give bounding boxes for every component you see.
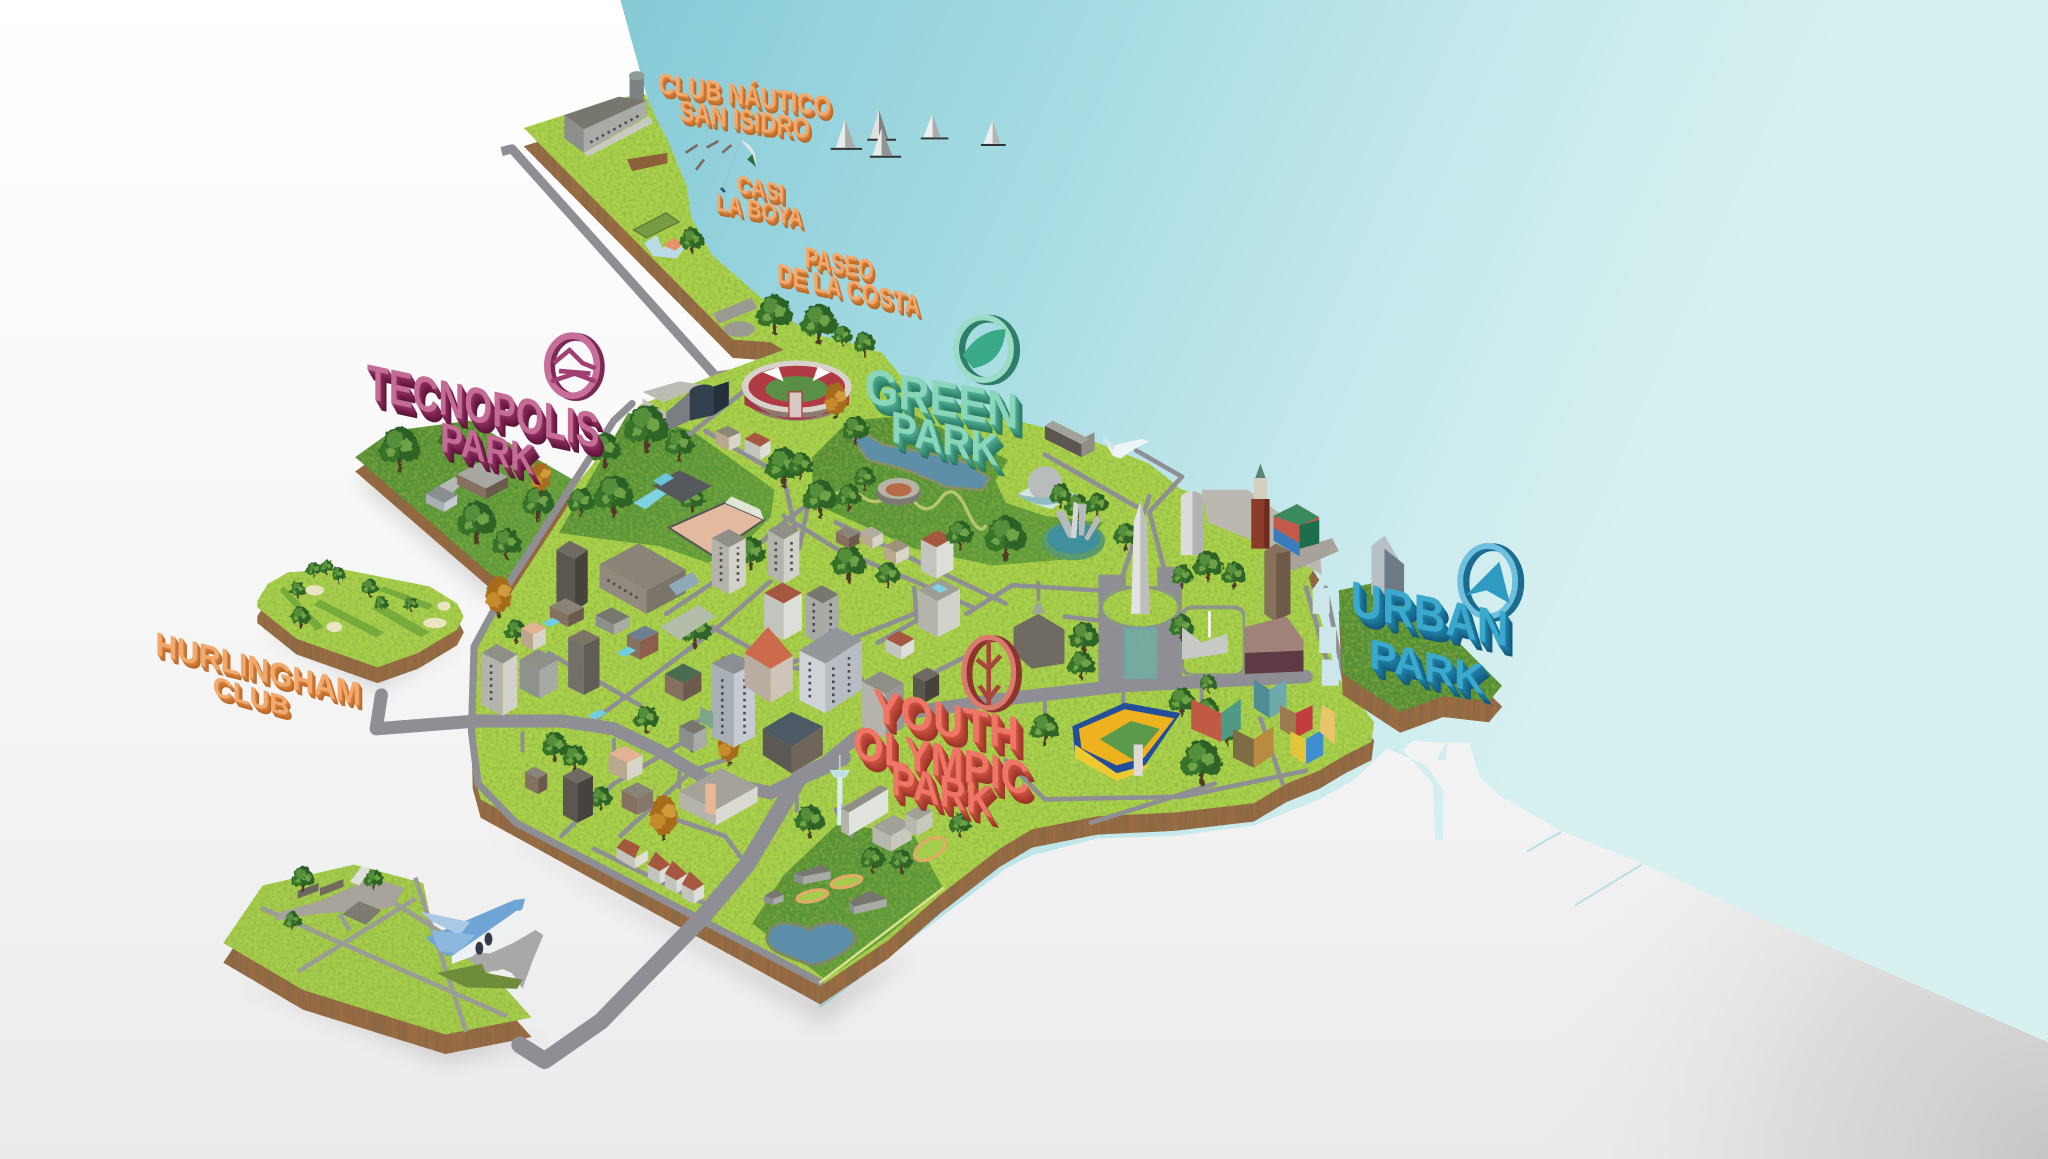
- plaza with oval lawn: [1101, 586, 1245, 675]
- icon: small plane: [1104, 438, 1149, 458]
- jetties on the south shore: [1527, 832, 1642, 905]
- icon: Youth Olympic ring: [964, 637, 1019, 709]
- panel: golf club island: [257, 559, 464, 683]
- red-roof terrace houses: [616, 839, 704, 904]
- TV tower: [831, 755, 849, 825]
- label: Urban Park: [1351, 572, 1512, 705]
- race tracks: [796, 833, 949, 904]
- river stadium: [742, 360, 852, 421]
- white long block: [841, 785, 888, 836]
- main land side (soil): [470, 112, 1374, 1004]
- lower west mid block: [622, 782, 653, 815]
- label: Green Park: GREEN: [865, 359, 1018, 440]
- trees: riverside: [680, 228, 876, 356]
- small dark green block: [665, 664, 701, 701]
- white chapel: [644, 235, 684, 259]
- white tower with rooftop pool: [918, 579, 960, 637]
- trees: [568, 405, 705, 518]
- dark green park: centre: [812, 415, 1104, 566]
- trees: Floralis surrounds: [1049, 484, 1138, 550]
- tennis stadium: [876, 478, 921, 505]
- peach house: [521, 622, 546, 650]
- small red house: [886, 631, 914, 660]
- small house: [679, 720, 707, 752]
- airport terminal building: [1045, 421, 1095, 457]
- Floralis pond: [1042, 521, 1105, 560]
- shipping containers: [1273, 504, 1319, 556]
- icon: Green Park ring: [956, 317, 1016, 381]
- dirt cut near club: [627, 153, 667, 171]
- panel: airport island: [223, 865, 543, 1054]
- Tecnopolis trees: [379, 425, 554, 561]
- long white apartments with peach core: [679, 768, 758, 825]
- label: Youth Olympic Park: YOUTH: [872, 678, 1019, 761]
- label: Tecnopolis Park: PARK: [440, 413, 535, 484]
- main land top (grass): [470, 94, 1374, 986]
- label: Paseo de la Costa: PASEO: [805, 241, 873, 287]
- swimming pools: [633, 473, 674, 509]
- road: Hurlingham connection and elevated highway: [376, 677, 1306, 1061]
- label: Club Nautico San Isidro: SAN ISIDRO: [679, 94, 810, 145]
- dark green park: south: [752, 823, 943, 980]
- avenue 9 de Julio: [1098, 567, 1182, 687]
- white tower: [768, 521, 799, 584]
- brown house: [550, 598, 584, 627]
- brown tower: [1264, 543, 1290, 620]
- Torre Monumental: [1251, 464, 1270, 549]
- panel: Urban Park island: [1339, 536, 1502, 733]
- label: Tecnopolis Park: TECNOPOLIS: [367, 355, 599, 460]
- dark green park: north-west: [559, 413, 775, 563]
- grey house: [596, 607, 630, 635]
- road: west edge and perimeter: [472, 404, 943, 982]
- Floralis sculpture: [1055, 502, 1101, 541]
- palm trees: [795, 805, 971, 874]
- bunkers: [306, 585, 451, 632]
- trees: city: [486, 448, 901, 840]
- green parks on main land: [559, 413, 1104, 980]
- glass plaza: [1123, 627, 1157, 679]
- label: Urban Park: PARK: [1369, 630, 1484, 703]
- Boca stadium: [1072, 703, 1181, 781]
- label: Urban Park: URBAN: [1351, 572, 1508, 658]
- plane shadow: [436, 930, 543, 989]
- winding path: [836, 490, 986, 529]
- trees: Green Park: [803, 383, 1108, 561]
- terminal apron: [274, 878, 405, 921]
- kite surfer and swimmers: [686, 140, 756, 192]
- pools: [542, 618, 636, 720]
- pale block: [862, 671, 904, 738]
- red gabled house: [744, 627, 793, 703]
- Tecnopolis pavilions: [426, 462, 508, 512]
- panel: Tecnopolis island: [355, 421, 575, 596]
- planetarium: [1016, 466, 1076, 509]
- houses near stadium: [716, 426, 741, 451]
- label: Casi La Boya: [716, 171, 806, 233]
- label: Hurlingham Club: HURLINGHAM: [155, 626, 361, 714]
- label: Club Nautico San Isidro: CLUB NÁUTICO: [658, 67, 831, 124]
- grey dark tower: [568, 630, 600, 695]
- greenhouse roof: [669, 572, 700, 596]
- lower dark tower: [563, 768, 593, 823]
- pool deck: [653, 470, 712, 503]
- locks on canal: [1313, 588, 1339, 686]
- Green Park landmarks: [803, 383, 1149, 561]
- row houses: [836, 526, 859, 549]
- north club building: [564, 71, 653, 157]
- Tecnopolis island soil: [355, 435, 575, 596]
- parking lots: [713, 298, 758, 337]
- dark tower: [556, 541, 588, 611]
- water: river: [620, 0, 2048, 1042]
- label: Green Park: [865, 359, 1022, 477]
- icon: Tecnopolis ring: [547, 336, 601, 397]
- white-blue tower: [799, 627, 862, 713]
- west mid-rise: [520, 649, 558, 699]
- grey blocks: [872, 815, 912, 852]
- trees: downtown: [1068, 551, 1247, 693]
- concrete port: [1202, 490, 1322, 575]
- brown palace: [1245, 616, 1304, 674]
- trees: La Boca: [1030, 688, 1238, 786]
- club house: [564, 97, 647, 153]
- golf island grass: [257, 569, 464, 667]
- barns: [794, 865, 831, 884]
- label: Paseo de la Costa: DE LA COSTA: [777, 258, 920, 321]
- large grey tower: [712, 653, 755, 747]
- Urban island grass: [1339, 581, 1502, 712]
- round tower: [1181, 491, 1203, 555]
- label: Youth Olympic Park: [853, 678, 1035, 828]
- airport island soil: [223, 884, 532, 1054]
- plaza court: [660, 605, 716, 640]
- dark gabled block: [763, 712, 823, 773]
- white obelisk small: [1208, 611, 1211, 637]
- dark slim building: [913, 667, 939, 703]
- label: Youth Olympic Park: PARK: [891, 755, 992, 828]
- grey tower: [806, 585, 839, 645]
- runways: [261, 878, 507, 1032]
- label: Casi La Boya: CASI: [737, 171, 784, 208]
- Tecnopolis side park facilities: [568, 405, 764, 555]
- icon: Urban Park ring: [1460, 546, 1520, 618]
- La Boca coloured houses: [1191, 679, 1335, 768]
- road: north access: [502, 149, 734, 376]
- Obelisk: [1131, 502, 1149, 614]
- icon: plane: [421, 899, 525, 964]
- airport island grass: [223, 865, 532, 1034]
- golf island soil: [257, 585, 464, 683]
- lake: Green Park: [849, 431, 990, 490]
- label: Hurlingham Club: CLUB: [213, 671, 289, 722]
- Tecnopolis island grass: [355, 421, 575, 581]
- airport trees: [284, 867, 383, 931]
- rugby fields: [633, 213, 679, 238]
- sports court: [669, 503, 764, 555]
- lower brown house: [525, 767, 547, 794]
- island shadows: [235, 470, 914, 1064]
- office complex: [643, 381, 729, 431]
- Congress palace: [1014, 581, 1064, 669]
- label: Youth Olympic Park: OLYMPIC: [853, 714, 1029, 806]
- label: Casi La Boya: LA BOYA: [716, 189, 803, 233]
- Urban island soil: [1339, 602, 1502, 733]
- red roof slim tower: [921, 530, 953, 579]
- red roof tower: [764, 583, 802, 640]
- street grid: [549, 385, 1345, 904]
- colonial block: [600, 543, 686, 614]
- Urban glass tower: [1371, 536, 1404, 598]
- brick house: [627, 626, 658, 660]
- white tower: [712, 529, 746, 594]
- fairways and bunkers: [280, 586, 434, 637]
- west white tower: [482, 644, 517, 716]
- southern park facilities: [764, 755, 971, 914]
- lake: heart pond: [767, 923, 856, 965]
- label: Green Park: PARK: [891, 402, 999, 476]
- city buildings: [482, 426, 960, 904]
- tower: [629, 71, 645, 104]
- Bank building: [1182, 627, 1228, 660]
- sailboats: [831, 110, 1006, 157]
- golf trees: [290, 559, 418, 628]
- road supports: [522, 688, 1202, 812]
- lower west peach tower: [609, 746, 643, 781]
- green-front house: [700, 707, 713, 729]
- terminal buildings: [298, 866, 381, 925]
